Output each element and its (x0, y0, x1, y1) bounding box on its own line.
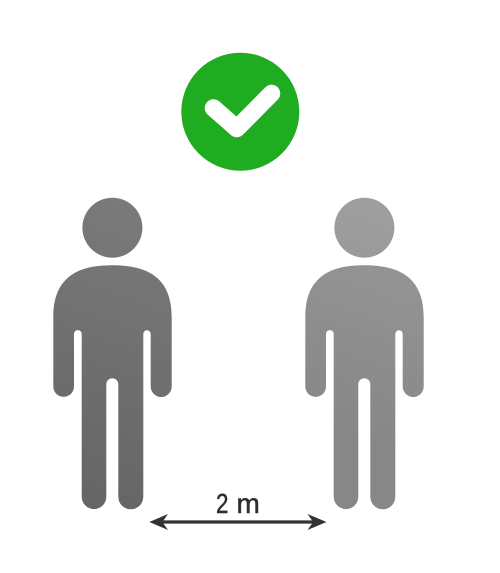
icon: right person (305, 198, 424, 509)
icon: left person (53, 198, 172, 509)
distance label (216, 488, 260, 520)
distance label: m (236, 488, 260, 519)
icon: green check mark badge (181, 53, 299, 171)
distance label: 2 (216, 489, 228, 520)
arrow: double-headed distance arrow (149, 514, 326, 530)
